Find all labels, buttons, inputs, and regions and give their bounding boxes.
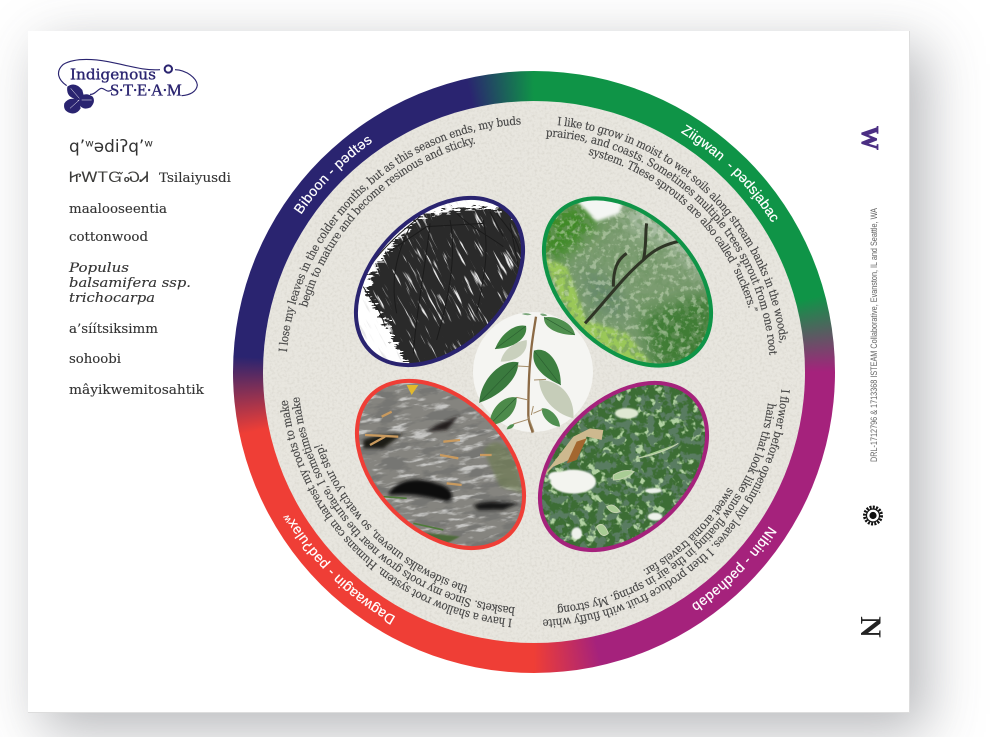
frame: green ellipse [512, 166, 743, 398]
seasonal colour ring [233, 71, 835, 673]
logo: gear [864, 507, 882, 524]
photo: cottonwood roots and bark [359, 382, 522, 546]
name: Cree: mâyikwemitosahtik [69, 383, 204, 398]
name: Lushootseed: q’ʷədi̇ʔq’ʷ [69, 137, 153, 157]
name: scientific: balsamifera ssp. [69, 276, 191, 291]
name: Cherokee: ᏥᎳᎢᏳᏍᏗ [69, 170, 149, 186]
name: scientific: Populus [68, 261, 129, 276]
photo: summer cottonwood tree [546, 200, 710, 364]
name: maalooseentia: maalooseentia [69, 202, 167, 217]
photo: bare winter tree [358, 200, 522, 363]
text: Nibin season: hairs that look like snow floating in the air in spring. My strong [558, 403, 777, 613]
names list [68, 137, 231, 398]
text: Dagwaagin season: I have a shallow root system. Humans can harvest my roots to make [280, 400, 512, 628]
text: Biboon season: I lose my leaves in the colder months, but as this season ends, my buds [278, 116, 521, 352]
name: scientific: trichocarpa [69, 291, 155, 306]
ring label: Dagwaagin: Dagwaagin - pədʔuləxʷ [283, 515, 396, 625]
paper centre of the wheel [263, 101, 805, 643]
logo: N: N [854, 616, 887, 638]
text: Dagwaagin season: baskets. Since my roots grow near the surface, I sometimes make [292, 397, 515, 616]
logo: Indigenous STEAM [59, 59, 197, 113]
centre plant illustration [473, 312, 593, 433]
text: Ziigwan season: system. These sprouts are also called “suckers.” [588, 149, 758, 311]
logo: Indigenous STEAM: Indigenous [70, 65, 156, 83]
text: Biboon season: begin to mature and become resinous and sticky. [298, 138, 476, 308]
name: sohoobi: sohoobi [69, 352, 121, 367]
grant credit: DRL-1712796 & 1713368 ISTEAM Collaborative, Evanston, IL and Seattle, WA [869, 208, 879, 462]
text: Ziigwan season: I like to grow in moist to wet soils along stream banks in the woods, [558, 116, 788, 343]
logo: Indigenous STEAM: S·T·E·A·M [110, 80, 182, 99]
name: cottonwood: cottonwood [69, 230, 148, 245]
ring label: Nibin: Nibin - pədhədəb [692, 526, 777, 610]
text: Dagwaagin season: the sidewalks uneven, so watch your step! [314, 444, 467, 594]
name: Tsilaiyusdi: Tsilaiyusdi [159, 171, 231, 186]
name: Blackfoot: a’síítsiksimm [69, 322, 158, 337]
text: Nibin season: I flower before opening my leaves. I then produce fruit with fluffy white [543, 390, 790, 628]
photo: cottonwood leaves and fluff [542, 384, 706, 548]
ring label: Ziigwan: Ziigwan - pədsi̧abac [680, 124, 778, 222]
frame: navy ellipse [324, 166, 555, 397]
text: Ziigwan season: prairies, and coasts. Sometimes multiple trees sprout from one root [546, 130, 777, 356]
frame: purple ellipse [508, 351, 739, 582]
logo: W: W [856, 126, 882, 150]
text: Nibin season: sweet aroma travels far. [644, 488, 733, 575]
frame: red ellipse [325, 349, 556, 580]
name: scientific [68, 261, 191, 306]
ring label: Biboon: Biboon - pədtəs [294, 136, 372, 214]
